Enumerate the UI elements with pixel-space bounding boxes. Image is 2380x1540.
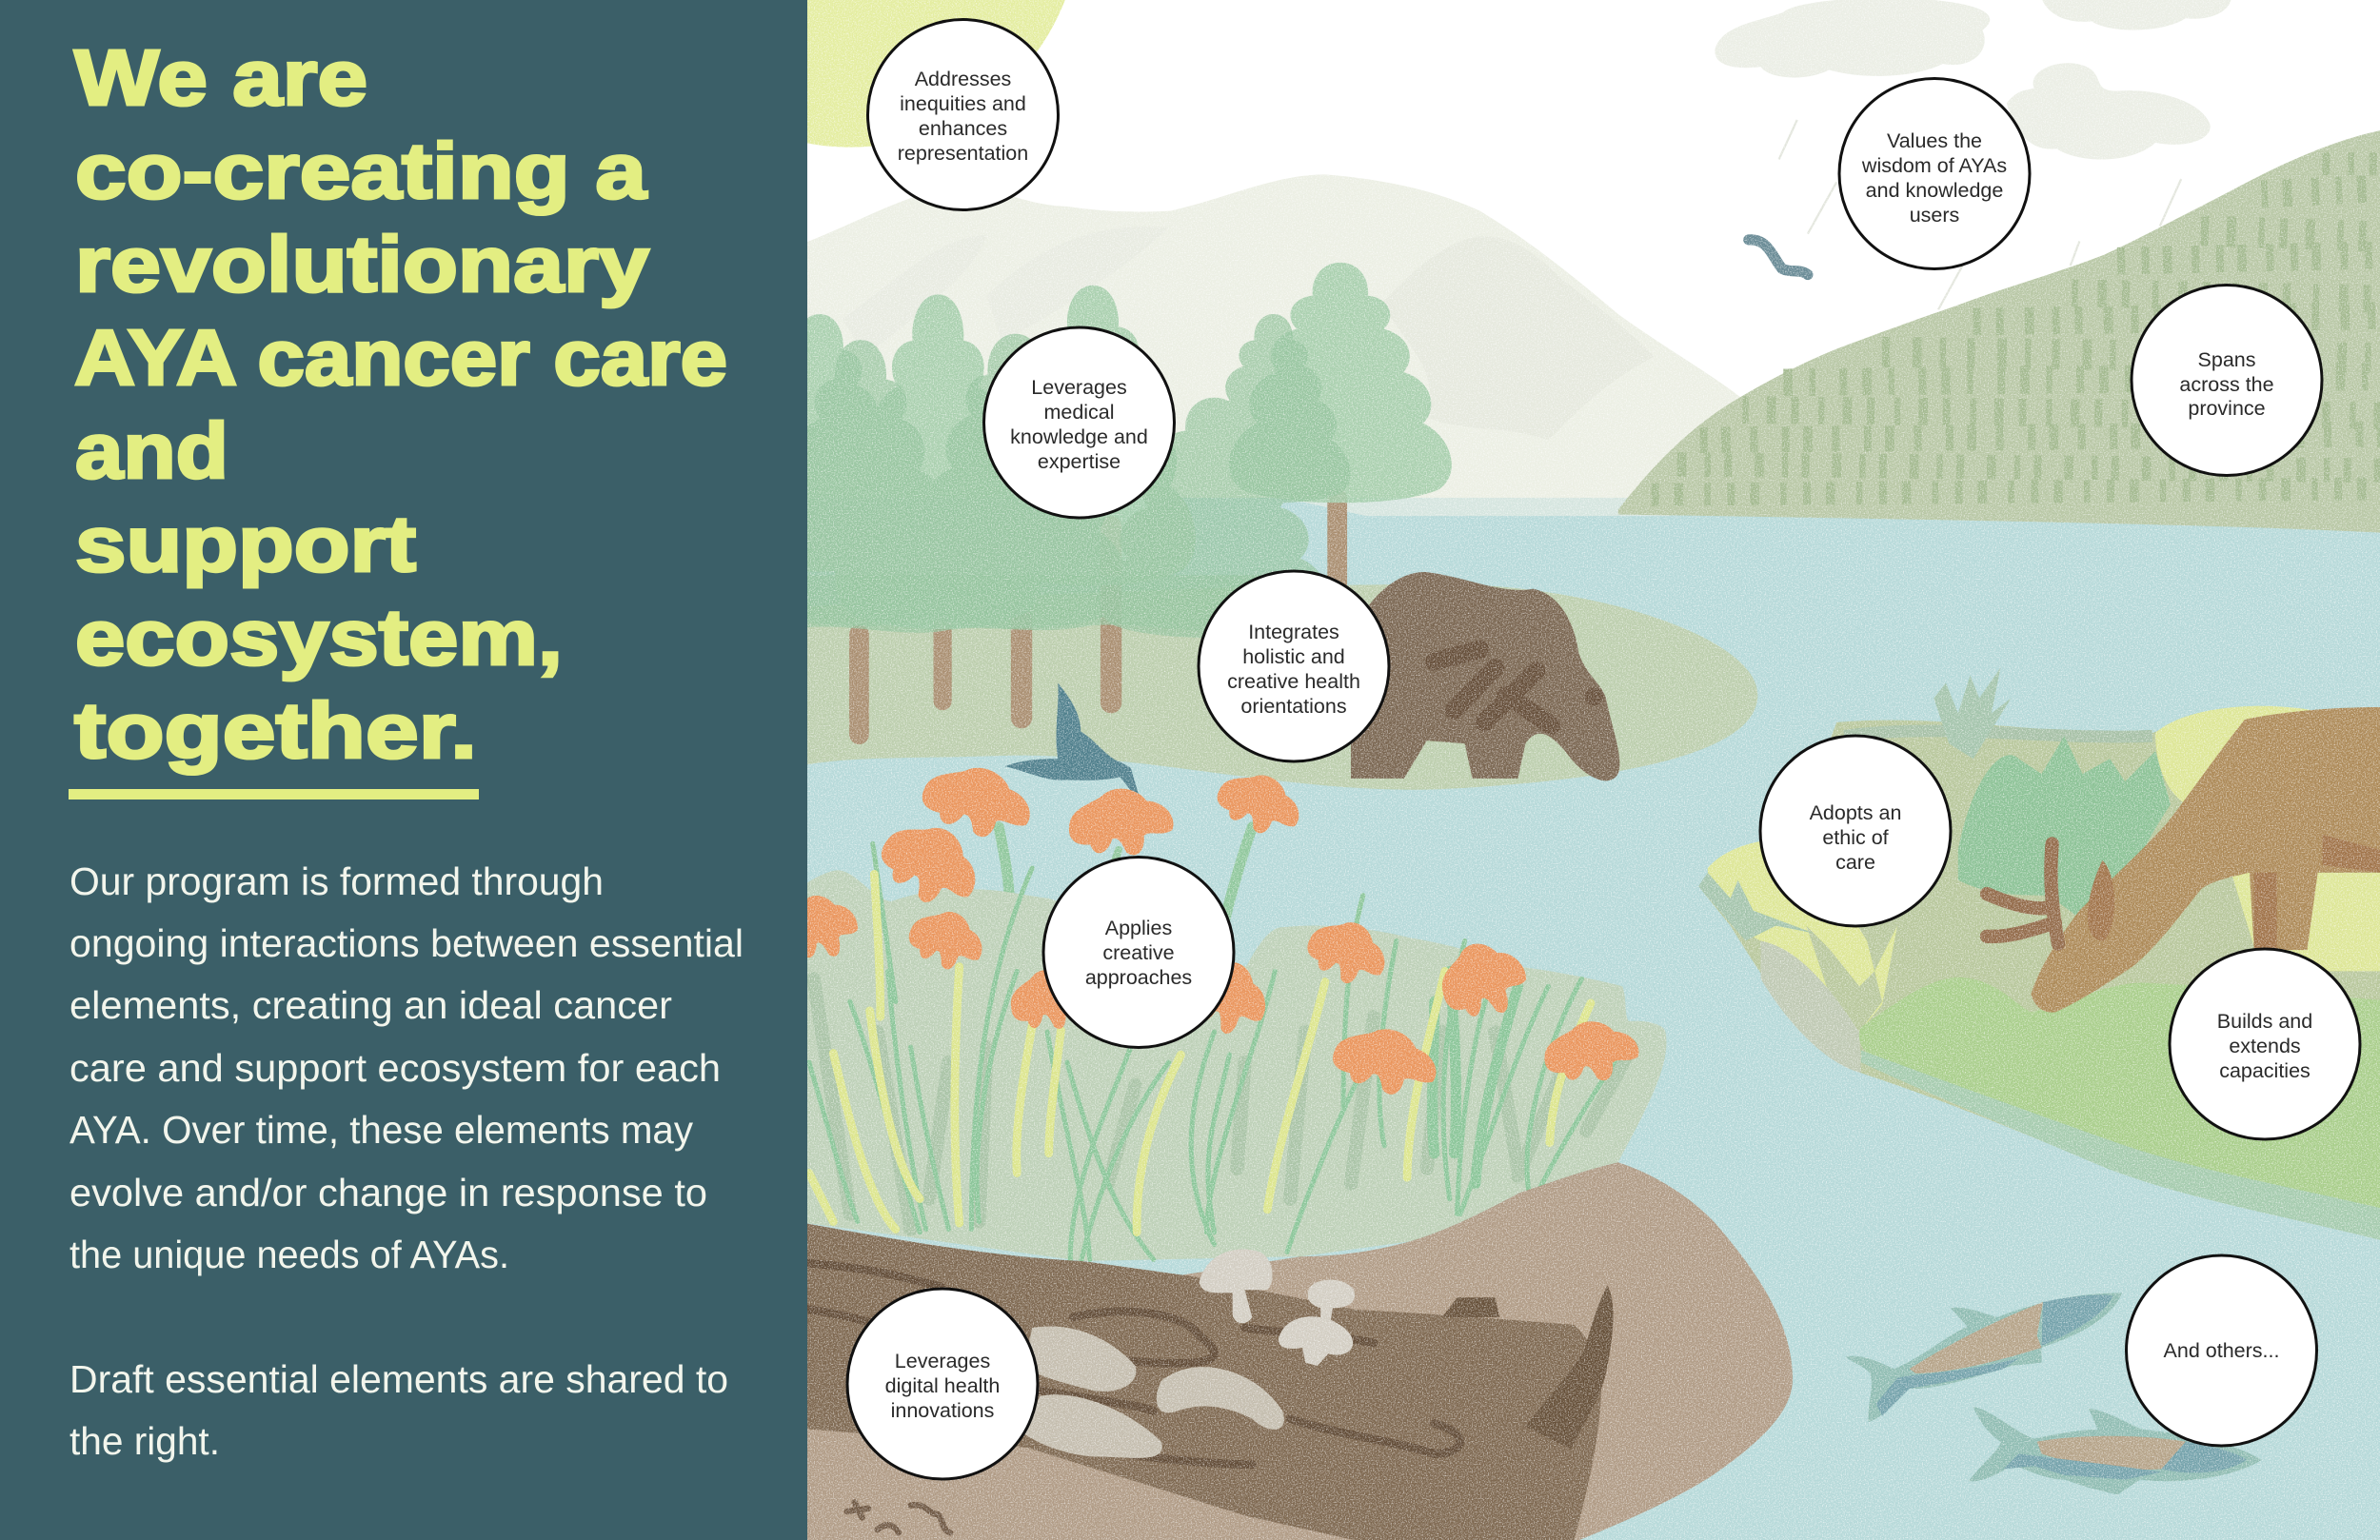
body paragraph: the unique needs of AYAs. bbox=[69, 1233, 509, 1276]
illustration: ecosystem landscape bbox=[620, 0, 2380, 1540]
top bank band bbox=[1844, 731, 2152, 737]
circle: digital health bbox=[847, 1289, 1038, 1479]
grass blades bbox=[809, 843, 1624, 1263]
grey bank bbox=[1761, 941, 1861, 1073]
body paragraph: AYA. Over time, these elements may bbox=[69, 1108, 693, 1152]
circle: spans province: across the bbox=[2179, 373, 2274, 396]
circle: spans province: province bbox=[2188, 397, 2266, 420]
closing note: the right. bbox=[69, 1419, 220, 1463]
rain streaks bbox=[1779, 120, 2181, 309]
reed meadow bbox=[797, 870, 1666, 1261]
circle: digital health: Leverages bbox=[895, 1350, 990, 1372]
circle: addresses inequities: inequities and bbox=[900, 92, 1026, 115]
circle: integrates holistic orientations bbox=[1199, 571, 1389, 761]
left text panel bbox=[0, 0, 807, 1540]
circle: values wisdom: and knowledge bbox=[1866, 179, 2003, 202]
circle: digital health: innovations bbox=[891, 1399, 994, 1422]
body paragraph: elements, creating an ideal cancer bbox=[69, 983, 672, 1027]
sun bbox=[620, 0, 1081, 148]
circle: ethic of care bbox=[1760, 736, 1951, 926]
circle: addresses inequities: representation bbox=[898, 142, 1028, 165]
circle: digital health: digital health bbox=[885, 1374, 1000, 1397]
forest floor bugs and leaf bbox=[847, 1502, 950, 1532]
tree trunks bbox=[859, 498, 1338, 735]
mushrooms bbox=[1200, 1250, 1355, 1366]
circle: leverages medical knowledge: Leverages bbox=[1031, 376, 1127, 399]
circle: ethic of care: Adopts an bbox=[1810, 801, 1901, 824]
closing note: Draft essential elements are shared to bbox=[69, 1357, 728, 1401]
deer bbox=[1987, 707, 2380, 1013]
forest bbox=[725, 263, 1452, 735]
bear bbox=[1351, 572, 1619, 780]
circle: and others bbox=[2127, 1255, 2317, 1446]
tree island bbox=[797, 584, 1757, 790]
circle: leverages medical knowledge: expertise bbox=[1038, 450, 1121, 473]
ground peninsula bbox=[797, 1162, 1793, 1540]
circle: ethic of care: ethic of bbox=[1822, 826, 1889, 849]
circle: spans province bbox=[2132, 286, 2322, 476]
title: ecosystem, bbox=[75, 593, 563, 681]
body paragraph: Our program is formed through bbox=[69, 859, 604, 903]
water bbox=[797, 498, 2380, 1540]
circle: addresses inequities: enhances bbox=[919, 117, 1007, 140]
circle: builds capacities bbox=[2170, 949, 2360, 1139]
body paragraph: evolve and/or change in response to bbox=[69, 1171, 707, 1214]
circle: values wisdom bbox=[1839, 78, 2030, 268]
circle: and others: And others... bbox=[2164, 1339, 2279, 1362]
circle: integrates holistic orientations: creative health bbox=[1227, 670, 1360, 693]
palm plants bbox=[1698, 668, 2012, 941]
title bbox=[74, 33, 727, 775]
antlers bbox=[1987, 843, 2058, 944]
circle: leverages medical knowledge: medical bbox=[1043, 401, 1115, 424]
log knots and branch bbox=[1442, 1285, 1614, 1450]
right meadow island bbox=[1698, 668, 2380, 1240]
fallen log bbox=[797, 1221, 1614, 1540]
circle: builds capacities: Builds and bbox=[2217, 1010, 2312, 1033]
bird in flight bbox=[1749, 240, 1808, 275]
title: co-creating a bbox=[75, 127, 647, 215]
title: AYA cancer care bbox=[74, 313, 727, 402]
circle: creative approaches: Applies bbox=[1105, 917, 1172, 939]
bark cracks bbox=[797, 1263, 1460, 1465]
hill with streaks bbox=[1618, 130, 2380, 533]
circle: spans province: Spans bbox=[2198, 348, 2255, 371]
circle: builds capacities: capacities bbox=[2219, 1059, 2311, 1082]
closing note bbox=[69, 1357, 728, 1463]
title: We are bbox=[74, 33, 367, 122]
salmon bbox=[1846, 1293, 2262, 1494]
body paragraph bbox=[69, 859, 744, 1276]
circle: addresses inequities: Addresses bbox=[915, 68, 1011, 90]
circle: builds capacities: extends bbox=[2229, 1035, 2301, 1057]
title underline bbox=[69, 789, 479, 800]
distant mountain bbox=[797, 174, 1741, 546]
flower stems bbox=[999, 827, 1252, 926]
bracket fungi bbox=[1024, 1327, 1284, 1458]
circle: values wisdom: users bbox=[1910, 204, 1959, 227]
broad grey reeds bbox=[814, 978, 1632, 1229]
circle: integrates holistic orientations: holistic and bbox=[1242, 645, 1345, 668]
circle: leverages medical knowledge: knowledge and bbox=[1010, 425, 1148, 448]
shoreline band bbox=[1861, 1050, 2380, 1240]
clouds bbox=[1715, 0, 2231, 160]
green foreground bank bbox=[1859, 977, 2380, 1214]
hummingbird bbox=[1004, 682, 1141, 804]
title: support bbox=[75, 500, 416, 588]
green shrubs bbox=[1958, 736, 2171, 918]
circle: integrates holistic orientations: orientations bbox=[1240, 695, 1347, 718]
title: and bbox=[75, 406, 228, 495]
yellow grass blades bbox=[809, 874, 1591, 1233]
body paragraph: care and support ecosystem for each bbox=[69, 1046, 721, 1090]
circle: integrates holistic orientations: Integrates bbox=[1248, 621, 1339, 643]
circle: values wisdom: wisdom of AYAs bbox=[1861, 154, 2007, 177]
circle: creative approaches: approaches bbox=[1085, 966, 1192, 989]
circle: leverages medical knowledge bbox=[984, 327, 1175, 518]
circle: creative approaches bbox=[1043, 857, 1234, 1047]
circle: ethic of care: care bbox=[1835, 851, 1875, 874]
circle: addresses inequities bbox=[868, 19, 1059, 209]
title: together. bbox=[74, 686, 477, 775]
circle: creative approaches: creative bbox=[1102, 941, 1175, 964]
circle: values wisdom: Values the bbox=[1887, 129, 1982, 152]
yellow patches bbox=[1708, 706, 2380, 1032]
body paragraph: ongoing interactions between essential bbox=[69, 921, 744, 965]
title: revolutionary bbox=[75, 220, 649, 308]
orange flowers bbox=[775, 757, 1642, 1101]
